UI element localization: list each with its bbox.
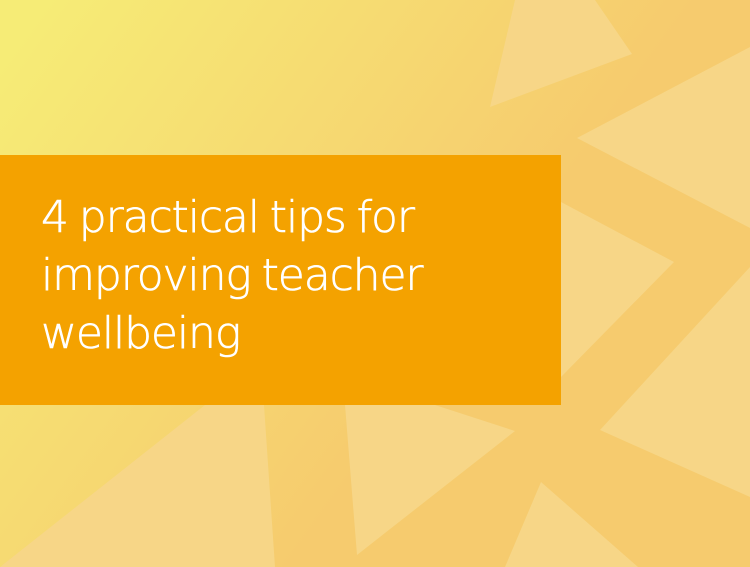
title: 4 practical tips for [41, 192, 414, 243]
title: wellbeing [41, 308, 240, 359]
title banner [0, 155, 561, 405]
title [41, 192, 424, 359]
title: improving teacher [41, 250, 422, 301]
